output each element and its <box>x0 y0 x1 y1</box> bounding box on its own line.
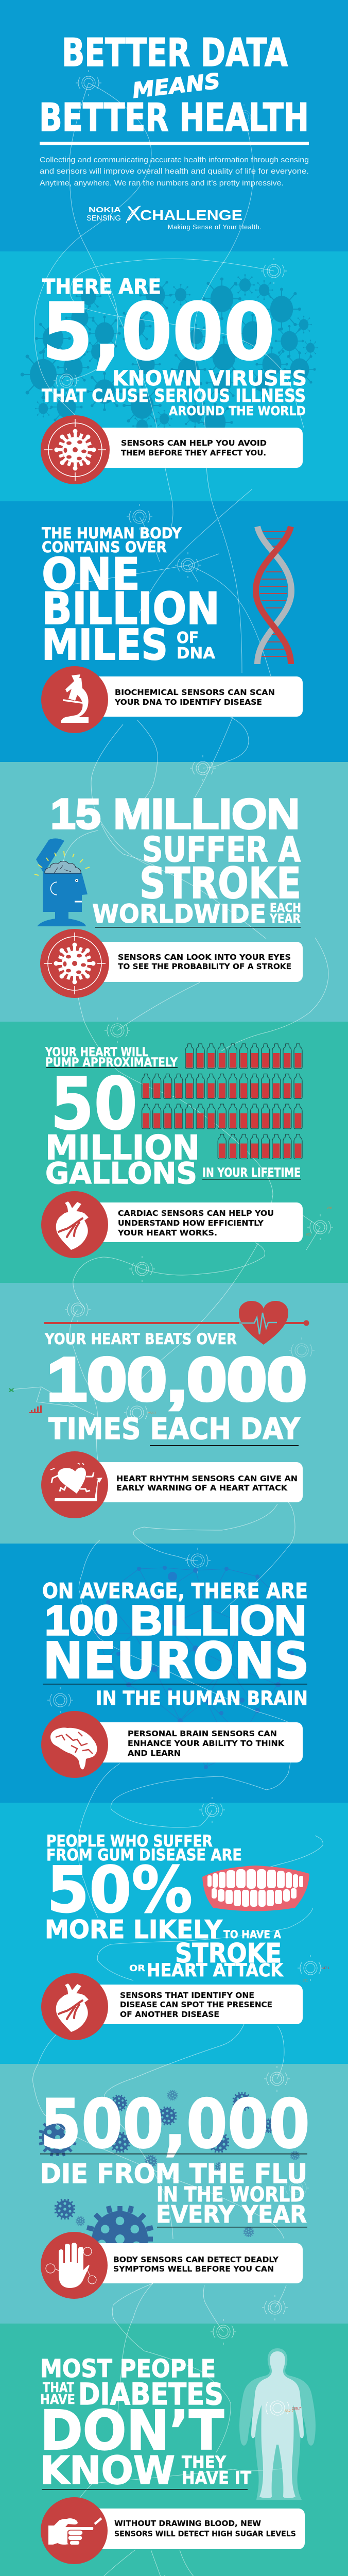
sensor network lines and targets: 201 <box>306 1233 311 1236</box>
heading: 100,000 times each day: YOUR HEART BEATS OVER <box>44 1330 237 1348</box>
callout: sensors look into eyes: SENSORS CAN LOOK INTO YOUR EYES <box>118 953 291 962</box>
heading: 100,000 times each day <box>44 1330 307 1446</box>
panel: viruses background with virus field <box>0 251 348 501</box>
heading: one billion miles of DNA: OF <box>177 629 199 647</box>
heading: 500,000 die from the flu: IN THE WORLD <box>156 2183 305 2207</box>
heading: most people with diabetes don't know: MOST PEOPLE <box>40 2354 216 2383</box>
heading: 100 billion neurons: IN THE HUMAN BRAIN <box>96 1687 308 1709</box>
panel: gum disease content <box>41 1832 309 2040</box>
panel: heart pump background <box>0 1022 348 1283</box>
callout: sensors avoid viruses: SENSORS CAN HELP YOU AVOID <box>121 438 267 448</box>
icon: virus in target <box>40 929 109 998</box>
heading: 50% more likely: PEOPLE WHO SUFFER <box>46 1832 213 1851</box>
logo: Nokia Sensing XCHALLENGE: CHALLENGE <box>140 207 242 223</box>
panel: gum disease background <box>0 1803 348 2064</box>
title <box>39 30 309 145</box>
icon: brain <box>41 1711 108 1778</box>
icon: glowing human body with sensor: 662.7 <box>285 2410 294 2413</box>
panel: flu content <box>40 2084 310 2299</box>
callout: body sensors <box>41 2232 303 2299</box>
sensor network lines and targets: 391 <box>303 1979 308 1982</box>
logo: Nokia Sensing XCHALLENGE: Making Sense of Your Health. <box>168 224 262 231</box>
intro text: Collecting and communicating accurate health information through sensing <box>40 156 309 164</box>
heading: one billion miles of DNA: DNA <box>177 645 216 663</box>
logo: Nokia Sensing XCHALLENGE: SENSING <box>86 214 121 223</box>
heading: 100,000 times each day: TIMES EACH DAY <box>48 1412 301 1446</box>
heading: one billion miles of DNA: ONE <box>42 549 140 600</box>
icon: heart running on treadmill <box>41 1451 108 1518</box>
panel: heart beats background <box>0 1283 348 1544</box>
heading: most people with diabetes don't know: THAT <box>43 2380 74 2396</box>
heading: 500,000 die from the flu: EVERY YEAR <box>156 2200 307 2228</box>
panel: viruses content <box>41 275 307 484</box>
heading: one billion miles of DNA: THE HUMAN BODY <box>42 524 182 542</box>
heading: there are 5,000 known viruses: THAT CAUSE SERIOUS ILLNESS <box>42 386 306 406</box>
heading: 50 million gallons: IN YOUR LIFETIME <box>202 1165 301 1180</box>
heading: one billion miles of DNA <box>42 524 220 670</box>
heading: one billion miles of DNA: MILES <box>42 621 168 670</box>
callout: biochemical sensors <box>41 666 303 733</box>
heading: most people with diabetes don't know <box>40 2354 252 2493</box>
panel: stroke background <box>0 762 348 1022</box>
callout: biochemical sensors: YOUR DNA TO IDENTIFY DISEASE <box>114 698 262 707</box>
heading: there are 5,000 known viruses <box>42 275 307 418</box>
callout: sensors spot other disease: DISEASE CAN SPOT THE PRESENCE <box>120 2000 272 2009</box>
sensor network lines and targets: 447.1 <box>322 1967 330 1970</box>
panel: flu background with flu viruses <box>0 2064 348 2324</box>
heading: most people with diabetes don't know: DON’T <box>40 2399 224 2462</box>
panel: diabetes content <box>40 2348 316 2564</box>
heading: 15 million suffer a stroke <box>50 790 301 929</box>
chart: blood-filled bottles <box>142 1044 302 1159</box>
heading: 500,000 die from the flu: DIE FROM THE FLU <box>40 2159 307 2190</box>
callout: body sensors: SYMPTOMS WELL BEFORE YOU CAN <box>113 2264 274 2274</box>
icon: pricked finger <box>41 2497 108 2564</box>
heading: 15 million suffer a stroke: YEAR <box>269 911 301 926</box>
heading: most people with diabetes don't know: HAVE <box>40 2392 75 2408</box>
heading: 15 million suffer a stroke: 15 MILLION <box>50 790 300 838</box>
icon: heart with pulse line <box>44 1301 309 1345</box>
callout: sensors avoid viruses: THEM BEFORE THEY AFFECT YOU. <box>121 448 266 457</box>
heading: 15 million suffer a stroke: WORLDWIDE <box>92 899 266 929</box>
heading: 50% more likely: 50% <box>47 1854 193 1927</box>
icon: DNA helix <box>256 527 291 664</box>
heading: 50 million gallons: MILLION <box>45 1129 200 1167</box>
heading: 100 billion neurons: 100 BILLION <box>45 1597 306 1644</box>
heading: most people with diabetes don't know: HAVE IT <box>182 2468 252 2488</box>
heading: one billion miles of DNA: CONTAINS OVER <box>42 538 167 556</box>
callout: sugar level sensors: SENSORS WILL DETECT HIGH SUGAR LEVELS <box>114 2529 296 2538</box>
callout: cardiac sensors: CARDIAC SENSORS CAN HELP YOU <box>118 1209 274 1218</box>
callout: sensors avoid viruses <box>41 415 303 484</box>
callout: sensors spot other disease: OF ANOTHER DISEASE <box>120 2010 219 2019</box>
heading: 50% more likely: OR <box>129 1963 145 1974</box>
panel: neurons background with neural network <box>0 1544 348 1803</box>
callout: heart rhythm sensors <box>41 1451 303 1518</box>
icon: glowing human body with sensor <box>239 2348 316 2500</box>
heading: there are 5,000 known viruses: THERE ARE <box>42 275 161 299</box>
callout: heart rhythm sensors: EARLY WARNING OF A HEART ATTACK <box>116 1483 288 1493</box>
heading: most people with diabetes don't know: KNOW <box>40 2448 175 2493</box>
sensor network lines and targets: 230 <box>327 1207 333 1210</box>
heading: 500,000 die from the flu: 500,000 <box>40 2084 310 2163</box>
callout: biochemical sensors: BIOCHEMICAL SENSORS CAN SCAN <box>115 688 275 697</box>
heading: 15 million suffer a stroke: STROKE <box>140 858 301 908</box>
callout: body sensors: BODY SENSORS CAN DETECT DEADLY <box>113 2255 279 2264</box>
callout: personal brain sensors: PERSONAL BRAIN SENSORS CAN <box>128 1729 277 1738</box>
heading: 50% more likely: FROM GUM DISEASE ARE <box>46 1846 242 1865</box>
logo: Nokia Sensing XCHALLENGE: X <box>127 202 141 225</box>
icon: microscope <box>41 666 108 733</box>
heading: 15 million suffer a stroke: EACH <box>270 901 301 915</box>
logo: Nokia Sensing XCHALLENGE <box>86 202 262 231</box>
heading: 500,000 die from the flu <box>40 2084 310 2228</box>
heading: 50 million gallons: PUMP APPROXIMATELY <box>45 1055 178 1070</box>
panel: diabetes background <box>0 2324 348 2576</box>
heading: 50% more likely: MORE LIKELY <box>45 1915 222 1944</box>
title: MEANS <box>131 69 221 103</box>
callout: cardiac sensors: UNDERSTAND HOW EFFICIENTLY <box>118 1218 264 1228</box>
heading: 50% more likely <box>45 1832 284 1981</box>
icon: anatomical heart <box>41 1191 108 1258</box>
icon: open head with brain <box>34 838 90 926</box>
heading: most people with diabetes don't know: DIABETES <box>78 2377 223 2412</box>
callout: cardiac sensors <box>41 1191 303 1258</box>
icon: virus in target <box>41 415 110 484</box>
callout: personal brain sensors <box>41 1711 303 1778</box>
intro text: Anytime, anywhere. We ran the numbers and it’s pretty impressive. <box>40 179 284 188</box>
heading: 100 billion neurons: NEURONS <box>43 1632 309 1690</box>
callout: personal brain sensors: ENHANCE YOUR ABILITY TO THINK <box>128 1739 285 1748</box>
panel: DNA background <box>0 501 348 762</box>
callout: sugar level sensors <box>41 2497 305 2564</box>
panel: heart beats content <box>41 1301 309 1518</box>
callout: sugar level sensors: WITHOUT DRAWING BLOOD, NEW <box>114 2519 261 2528</box>
heading: 50 million gallons: GALLONS <box>45 1157 197 1191</box>
heading: 100 billion neurons <box>42 1579 309 1709</box>
panel: neurons content <box>41 1579 309 1778</box>
panel: stroke content <box>34 790 303 998</box>
heading: one billion miles of DNA: BILLION <box>42 583 220 635</box>
heading: there are 5,000 known viruses: KNOWN VIRUSES <box>112 367 307 391</box>
heading: 50% more likely: STROKE <box>175 1938 282 1969</box>
icon: hand with sensor nodes <box>41 2232 108 2299</box>
heading: 100,000 times each day: 100,000 <box>47 1345 307 1414</box>
title: BETTER DATA <box>62 30 288 75</box>
icon: teeth <box>202 1866 309 1911</box>
callout: personal brain sensors: AND LEARN <box>128 1749 181 1758</box>
callout: sensors look into eyes: TO SEE THE PROBABILITY OF A STROKE <box>118 962 291 971</box>
callout: sensors spot other disease <box>41 1973 303 2040</box>
heading: most people with diabetes don't know: THEY <box>182 2452 227 2472</box>
heading: 15 million suffer a stroke: SUFFER A <box>142 829 301 870</box>
icon: glowing human body with sensor: 286.7 <box>292 2407 301 2411</box>
panel: header content <box>39 30 309 231</box>
panel: heart pump content <box>41 1044 303 1258</box>
heading: 50 million gallons: YOUR HEART WILL <box>45 1045 148 1059</box>
icon: anatomical heart <box>41 1973 108 2040</box>
panel: header background <box>0 0 348 251</box>
heading: there are 5,000 known viruses: 5,000 <box>42 286 275 378</box>
heading: there are 5,000 known viruses: AROUND THE WORLD <box>169 403 306 418</box>
intro text <box>40 156 309 188</box>
callout: sensors spot other disease: SENSORS THAT IDENTIFY ONE <box>120 1991 254 2000</box>
callout: sensors look into eyes <box>40 929 303 998</box>
panel: DNA content <box>41 524 303 733</box>
heading: 50 million gallons <box>45 1045 301 1191</box>
heading: 50% more likely: HEART ATTACK <box>147 1960 284 1981</box>
callout: heart rhythm sensors: HEART RHYTHM SENSORS CAN GIVE AN <box>116 1474 298 1483</box>
heading: 50 million gallons: 50 <box>50 1062 137 1146</box>
heading: 50% more likely: TO HAVE A <box>223 1928 282 1941</box>
sensor network lines and targets: 256.7 <box>148 1412 156 1415</box>
heading: 100 billion neurons: ON AVERAGE, THERE ARE <box>42 1579 308 1603</box>
intro text: and sensors will improve overall health and quality of life for everyone. <box>40 167 309 176</box>
logo: Nokia Sensing XCHALLENGE: NOKIA <box>89 206 121 214</box>
callout: cardiac sensors: YOUR HEART WORKS. <box>117 1228 217 1238</box>
